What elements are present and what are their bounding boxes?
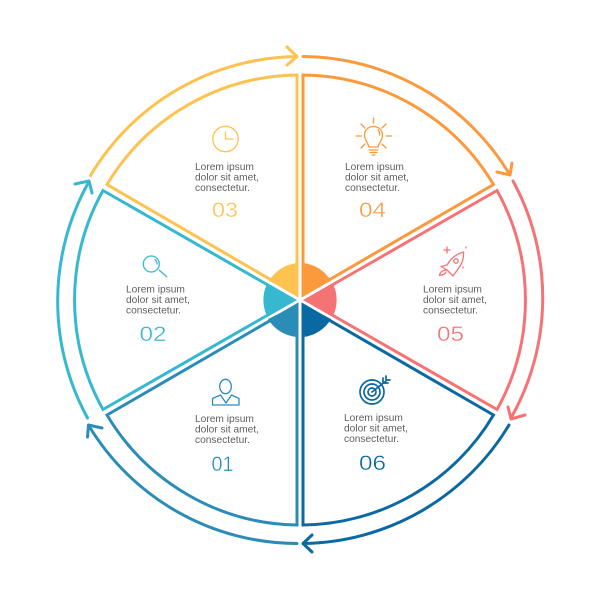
sector outline 05 — [306, 190, 525, 410]
text 04: consectetur. — [345, 183, 400, 194]
sector outline 04 — [303, 75, 494, 295]
text 03: dolor sit amet, — [195, 172, 259, 184]
text 05: consectetur. — [423, 306, 478, 316]
number 01: 01 — [212, 453, 234, 476]
text 01: Lorem ipsum — [195, 414, 254, 425]
text 02: consectetur. — [126, 306, 181, 316]
text 03: consectetur. — [195, 183, 250, 194]
text 05: Lorem ipsum — [423, 284, 482, 296]
segment 05 — [306, 190, 525, 410]
arrow 06 — [303, 425, 509, 552]
icon: magnifier — [143, 256, 167, 277]
arrow 03 — [90, 47, 297, 176]
hub wedge 06 — [303, 305, 331, 337]
sector outline 01 — [107, 305, 297, 525]
sector outline 03 — [107, 75, 297, 295]
number 06: 06 — [359, 452, 386, 475]
text 06: dolor sit amet, — [344, 424, 408, 434]
text 01: dolor sit amet, — [195, 424, 259, 436]
arrow 05 — [508, 181, 543, 419]
number 03: 03 — [212, 199, 238, 222]
hub wedge 02 — [263, 284, 294, 316]
segment 03 — [107, 75, 297, 295]
text 04: dolor sit amet, — [345, 172, 409, 184]
number 04: 04 — [359, 199, 386, 222]
icon: clock — [213, 126, 238, 152]
arrow 04 — [303, 56, 512, 175]
text 06: consectetur. — [344, 434, 399, 445]
hub wedge 03 — [269, 263, 297, 294]
hub wedge 05 — [306, 284, 337, 316]
arrow 01 — [88, 425, 297, 544]
sector outline 02 — [75, 190, 294, 410]
text 03: Lorem ipsum — [195, 162, 254, 173]
icon: light bulb — [356, 118, 392, 155]
segment 06 — [303, 305, 494, 525]
icon: rocket — [440, 247, 466, 276]
text 05: dolor sit amet, — [423, 295, 487, 306]
sector outline 06 — [303, 305, 494, 525]
text 04: Lorem ipsum — [345, 162, 404, 173]
text 01: consectetur. — [195, 435, 250, 446]
hub wedge 01 — [268, 305, 297, 337]
number 05: 05 — [437, 323, 464, 346]
hub wedge 04 — [303, 263, 331, 294]
text 02: Lorem ipsum — [126, 284, 185, 296]
segment 02 — [75, 190, 294, 410]
segment 01 — [107, 305, 297, 525]
number 02: 02 — [140, 323, 166, 346]
icon: target — [360, 376, 390, 404]
arrow 02 — [58, 181, 92, 418]
text 06: Lorem ipsum — [344, 413, 403, 424]
segment 04 — [303, 75, 494, 295]
icon: person — [212, 379, 239, 405]
text 02: dolor sit amet, — [126, 295, 190, 306]
